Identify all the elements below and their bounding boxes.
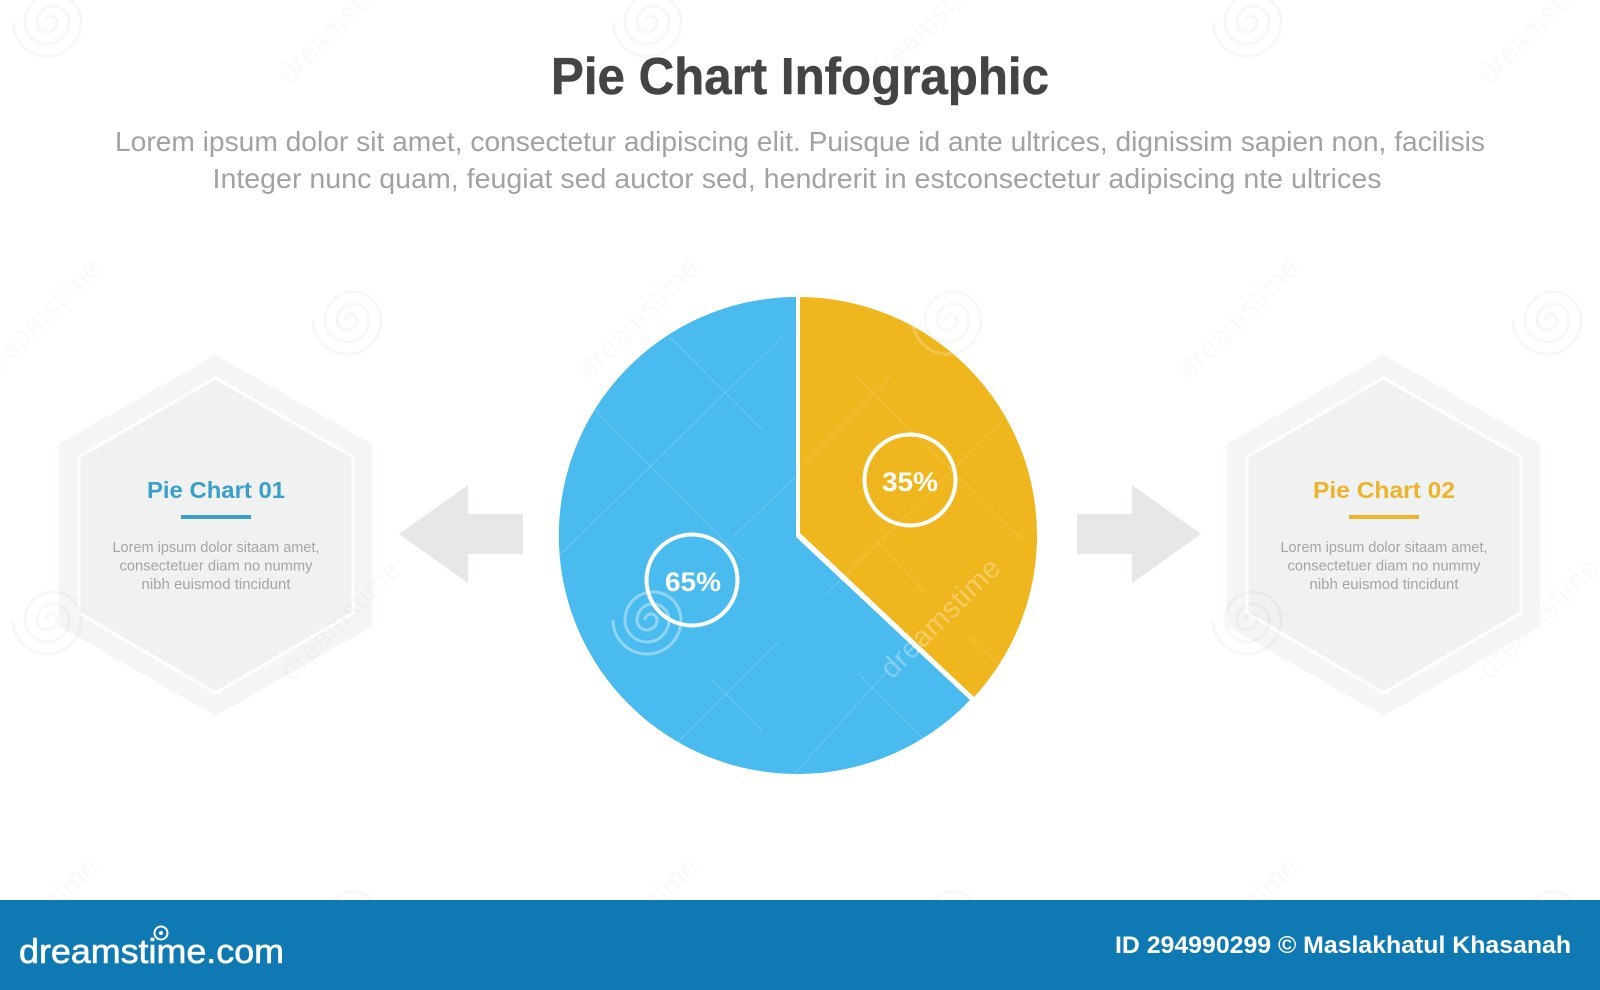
description <box>112 540 320 593</box>
background watermark pattern: dreamstime <box>1172 851 1306 984</box>
slice: 65% blue <box>559 297 970 774</box>
badge: 35% <box>864 434 956 526</box>
hexagon outer and inner shape <box>1227 355 1540 716</box>
panel: pie chart 01 hexagon <box>59 355 372 716</box>
description: consectetuer diam no nummy <box>120 558 313 574</box>
hexagon outer and inner shape <box>59 355 372 716</box>
description: consectetuer diam no nummy <box>1288 558 1481 574</box>
subtitle text block: Integer nunc quam, feugiat sed auctor sed, hendrerit in estconsectetur adipiscing nte ultrices <box>212 163 1382 194</box>
pie watermark lines <box>560 337 1023 773</box>
pie watermark marks <box>613 292 1008 685</box>
hexagon watermarks <box>13 554 1281 687</box>
pie chart <box>559 292 1037 774</box>
description: nibh euismod tincidunt <box>142 577 290 593</box>
badge: 35%: 35% <box>882 467 938 497</box>
pie watermark marks: dreamstime <box>874 552 1008 685</box>
heading: Pie Chart 01: Pie Chart 01 <box>147 477 285 503</box>
panel: pie chart 02 hexagon <box>1227 355 1540 716</box>
badge: 65%: 65% <box>665 567 721 597</box>
heading: Pie Chart 02: Pie Chart 02 <box>1313 477 1455 503</box>
underline <box>1349 515 1419 519</box>
slice: 35% yellow <box>800 297 1037 697</box>
subtitle text block <box>115 126 1485 194</box>
description: Lorem ipsum dolor sitaam amet, <box>1280 540 1488 556</box>
arrow: right <box>1077 485 1201 583</box>
arrow: left <box>399 485 523 583</box>
background watermark pattern: dreamstime <box>1172 252 1306 385</box>
footer logo: dreamstime.com <box>19 933 284 971</box>
footer band <box>0 900 1600 990</box>
description <box>1280 540 1488 593</box>
description: Lorem ipsum dolor sitaam amet, <box>112 540 320 556</box>
background watermark pattern: dreamstime <box>572 851 706 984</box>
badge: 65% <box>646 534 738 626</box>
title: Pie Chart Infographic <box>551 48 1049 106</box>
footer credit: ID 294990299 © Maslakhatul Khasanah <box>1115 932 1571 959</box>
subtitle text block: Lorem ipsum dolor sit amet, consectetur adipiscing elit. Puisque id ante ultrices, dignissim sapien non, facilisis <box>115 126 1485 157</box>
hexagon watermarks: dreamstime <box>274 554 408 687</box>
background watermark pattern: dreamstime <box>572 252 706 385</box>
description: nibh euismod tincidunt <box>1310 577 1458 593</box>
underline <box>181 515 251 519</box>
